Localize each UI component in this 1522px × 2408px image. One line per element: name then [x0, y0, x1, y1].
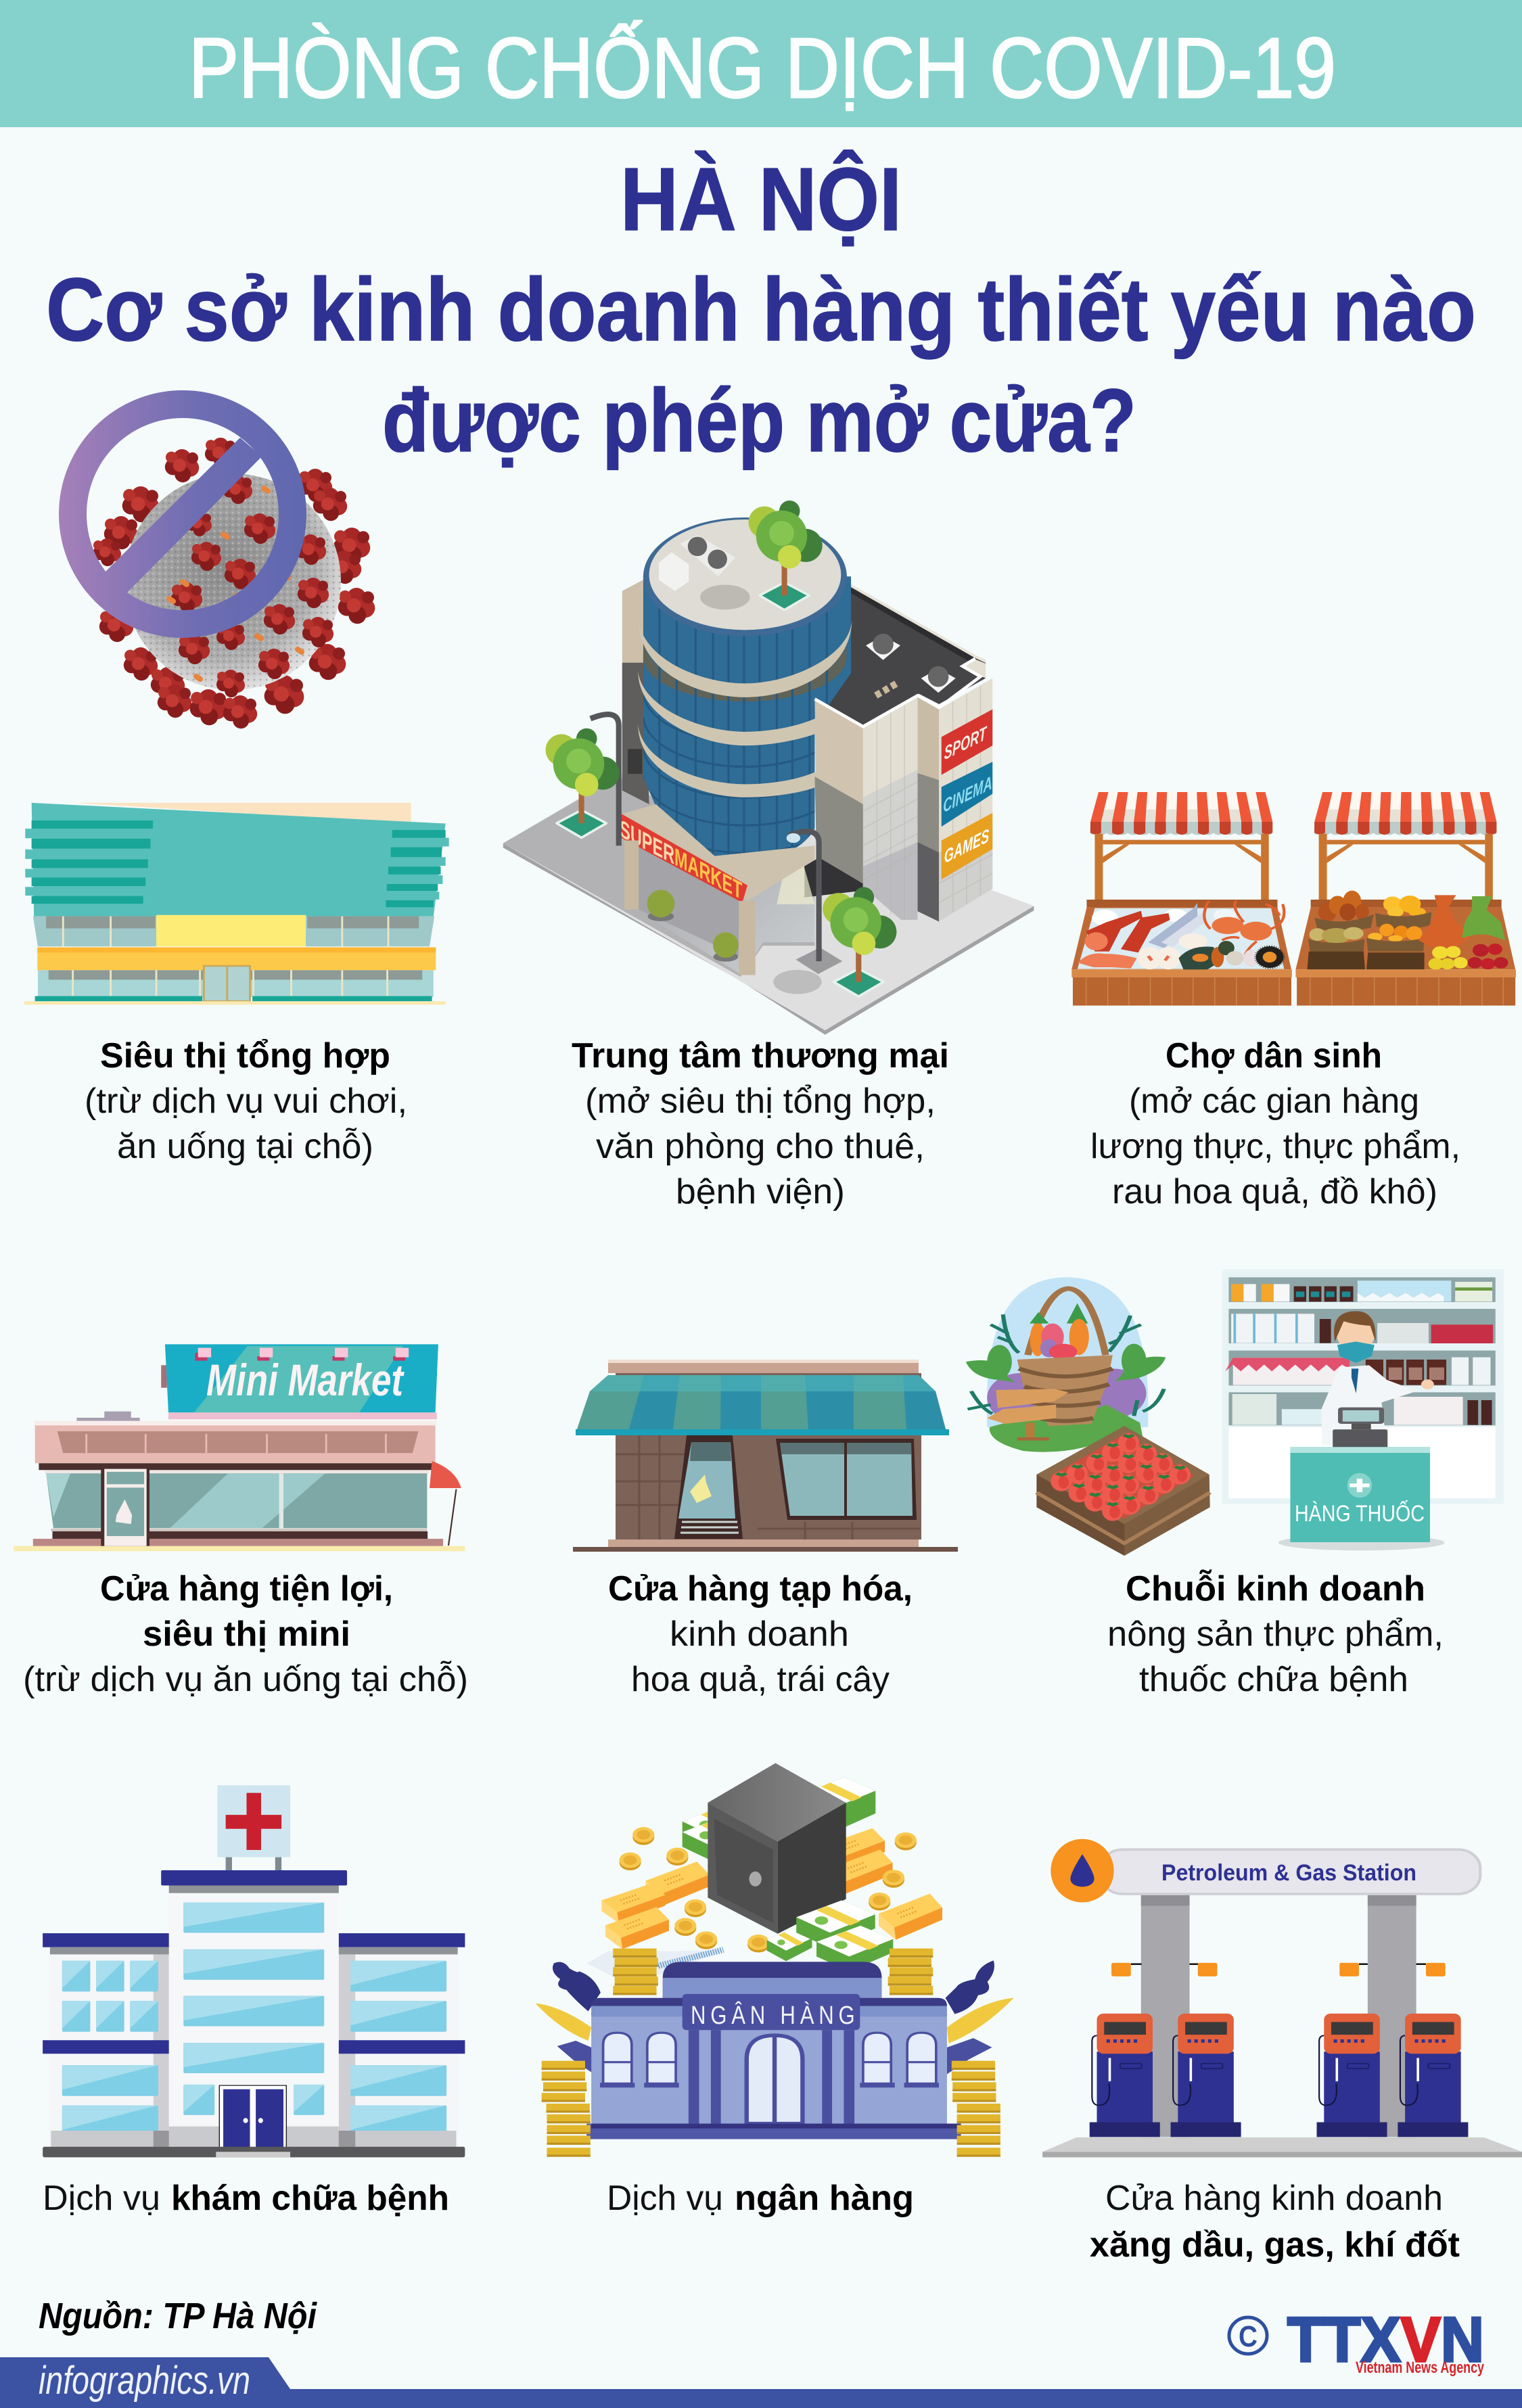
panel: convenience store	[14, 1344, 468, 1699]
front block of mall	[814, 634, 992, 921]
main heading: được phép mở cửa?	[382, 371, 1136, 470]
label: market	[1090, 1036, 1460, 1211]
banner: cinema	[942, 762, 992, 827]
label: medical: Dịch vụ	[43, 2179, 160, 2218]
logo: TTXVN	[1229, 2304, 1484, 2377]
wordmark: TTXVN	[1287, 2304, 1484, 2375]
safe	[708, 1763, 846, 1934]
money pile back	[586, 1778, 942, 1980]
illustration: vegetable basket	[966, 1277, 1166, 1452]
banner: sport: SPORT	[944, 722, 987, 764]
lobsters	[1086, 911, 1170, 952]
label: market: Chợ dân sinh	[1166, 1036, 1382, 1075]
label: grocery: kinh doanh	[670, 1615, 849, 1654]
label: mall: bệnh viện)	[676, 1172, 845, 1211]
illustration: hospital	[43, 1785, 465, 2157]
label: supermarket	[85, 1036, 407, 1166]
label: petrol	[1090, 2179, 1460, 2265]
panel: supermarket	[24, 803, 449, 1166]
street lamp right	[789, 831, 819, 961]
label: supermarket: (trừ dịch vụ vui chơi,	[85, 1082, 407, 1121]
illustration: seafood stall	[1071, 792, 1291, 972]
banner: cinema: CINEMA	[943, 772, 992, 817]
label: medical	[43, 2179, 449, 2218]
crabs	[1212, 917, 1244, 934]
banner: games	[942, 813, 992, 879]
counter text: HÀNG THUỐC	[1295, 1500, 1425, 1527]
panel: food and pharmacy chain	[966, 1270, 1504, 1699]
icon: banned coronavirus	[73, 404, 375, 728]
label: convenience store: (trừ dịch vụ ăn uống tại chỗ)	[23, 1660, 468, 1699]
tower rings	[638, 618, 852, 697]
virus	[93, 438, 375, 728]
label: banking	[607, 2179, 914, 2218]
website: infographics.vn	[39, 2359, 250, 2403]
supermarket sign	[620, 814, 747, 906]
awning	[576, 1375, 949, 1435]
main heading	[46, 149, 1476, 470]
label: grocery: hoa quả, trái cây	[631, 1660, 890, 1699]
label: market: lương thực, thực phẩm,	[1090, 1127, 1460, 1166]
copyright mark: C	[1239, 2320, 1258, 2353]
label: petrol: xăng dầu, gas, khí đốt	[1090, 2225, 1460, 2265]
street lamp left	[591, 714, 619, 846]
illustration: mini market	[14, 1344, 465, 1551]
header band	[0, 0, 1522, 127]
label: market: (mở các gian hàng	[1129, 1082, 1419, 1121]
station sign text: Petroleum & Gas Station	[1161, 1860, 1416, 1886]
rooftop equipment	[659, 553, 689, 591]
panel: banking services	[535, 1763, 1014, 2218]
label: convenience store	[23, 1569, 468, 1699]
panel: medical services	[43, 1785, 465, 2218]
copyright mark	[1229, 2317, 1267, 2354]
label: grocery	[608, 1569, 913, 1699]
label: mall: Trung tâm thương mại	[572, 1036, 949, 1075]
illustration: grocery shop	[573, 1360, 958, 1552]
round tower	[643, 576, 851, 860]
panel: market stalls	[1071, 792, 1516, 1211]
main heading: HÀ NỘI	[620, 149, 902, 249]
label: chain	[1107, 1569, 1444, 1699]
label: convenience store: Cửa hàng tiện lợi,	[100, 1569, 393, 1608]
panel: grocery store	[573, 1360, 958, 1699]
illustration: pharmacist at counter	[1222, 1270, 1504, 1550]
label: market: rau hoa quả, đồ khô)	[1112, 1172, 1437, 1211]
bank building	[535, 1949, 1014, 2157]
source note: Nguồn: TP Hà Nội	[39, 2296, 317, 2336]
illustration: tomato crate	[1036, 1426, 1210, 1556]
prohibition sign	[73, 404, 292, 624]
shells	[1138, 947, 1162, 969]
banner: sport	[942, 710, 992, 775]
fish	[1149, 903, 1197, 948]
illustration: mall building	[503, 501, 1034, 1035]
footer bar	[0, 2357, 1522, 2408]
label: supermarket: ăn uống tại chỗ)	[117, 1127, 373, 1166]
panel: shopping mall	[503, 501, 1034, 1211]
label: convenience store: siêu thị mini	[143, 1615, 350, 1654]
label: supermarket: Siêu thị tổng hợp	[100, 1036, 390, 1075]
label: mall: (mở siêu thị tổng hợp,	[585, 1082, 936, 1121]
label: mall: văn phòng cho thuê,	[596, 1127, 925, 1166]
illustration: petrol station	[1042, 1839, 1522, 2157]
label: banking: ngân hàng	[735, 2179, 914, 2218]
label: chain: nông sản thực phẩm,	[1107, 1615, 1444, 1654]
label: grocery: Cửa hàng tạp hóa,	[608, 1569, 913, 1608]
illustration: supermarket building	[24, 803, 449, 1004]
canopy slab	[622, 804, 814, 901]
label: mall	[572, 1036, 949, 1211]
money pile front	[767, 1900, 893, 1971]
header title: PHÒNG CHỐNG DỊCH COVID-19	[189, 20, 1336, 116]
bank sign text: NGÂN HÀNG	[691, 2001, 855, 2030]
label: banking: Dịch vụ	[607, 2179, 723, 2218]
rear wall	[622, 579, 649, 804]
illustration: fruit and vegetable stall	[1295, 792, 1515, 970]
stall fronts	[1071, 969, 1516, 1006]
mussels	[1178, 946, 1222, 972]
sign text: Mini Market	[206, 1355, 405, 1405]
panel: petrol station	[1042, 1839, 1522, 2265]
storefront back wall	[639, 846, 739, 956]
label: chain: thuốc chữa bệnh	[1139, 1660, 1408, 1699]
banner: games: GAMES	[944, 825, 989, 868]
illustration: bank with safe and money	[535, 1763, 1014, 2157]
supermarket sign: SUPERMARKET	[620, 815, 742, 906]
label: chain: Chuỗi kinh doanh	[1126, 1569, 1425, 1608]
label: medical: khám chữa bệnh	[171, 2179, 449, 2218]
label: petrol: Cửa hàng kinh doanh	[1105, 2179, 1443, 2218]
